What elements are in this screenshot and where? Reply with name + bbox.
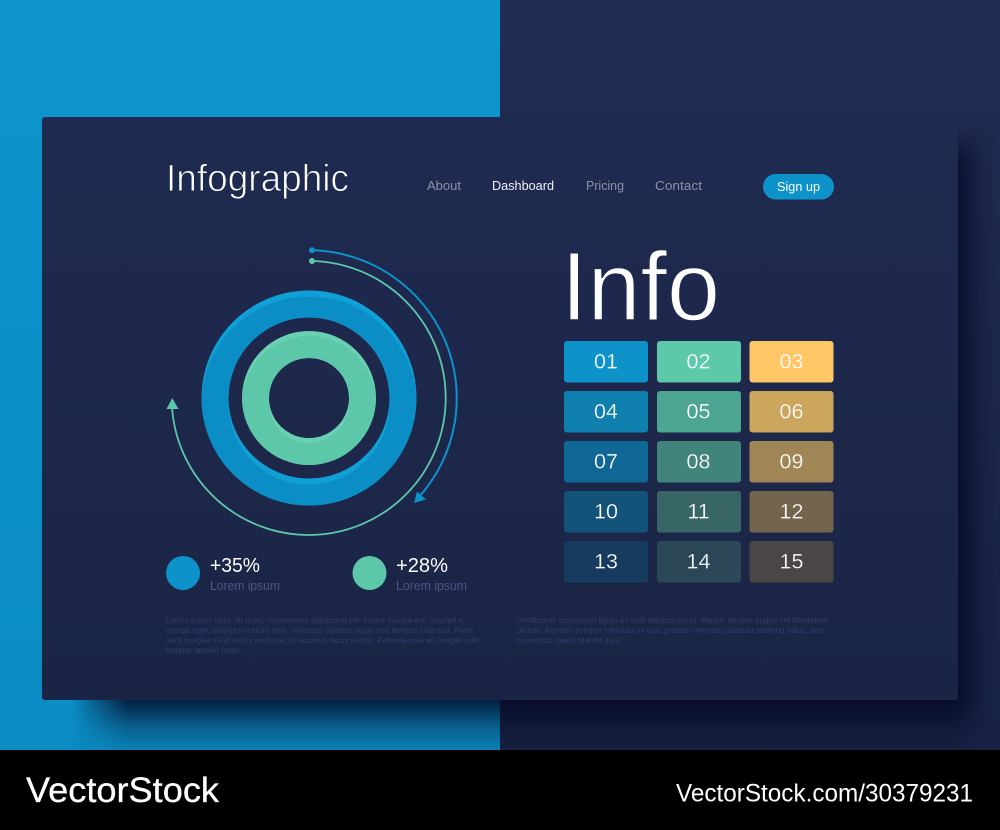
text block: right paragraph: commodo quam blandit quis bbox=[517, 636, 619, 645]
text block: right paragraph bbox=[517, 616, 828, 645]
tile 15 bbox=[750, 541, 834, 582]
tile 10 bbox=[564, 491, 648, 532]
tile 01: 01 bbox=[594, 350, 618, 374]
sign up button bbox=[763, 174, 834, 200]
navigation bbox=[427, 178, 702, 193]
background: right navy panel bbox=[500, 0, 1000, 750]
tile 08 bbox=[657, 441, 741, 482]
text block: left paragraph: sent congue mi ut turpis vehicula, in faucibus lacus auctor. Pellentesque eu feugiat odio, bbox=[166, 636, 482, 645]
stat: +35% bbox=[166, 555, 280, 593]
footer logo: VectorStock bbox=[26, 771, 220, 810]
inner green ring bbox=[242, 331, 376, 465]
tile 11: 11 bbox=[687, 500, 710, 524]
tile 04 bbox=[564, 391, 648, 432]
outer blue ring bbox=[202, 290, 416, 506]
tile 14 bbox=[657, 541, 741, 582]
tile 01 bbox=[564, 341, 648, 382]
tile 12: 12 bbox=[780, 500, 803, 524]
text block: left paragraph: massa eget, aliquet tincidunt nibh. Vivamus dapibus ligula sed tempus placerat. Prae- bbox=[166, 626, 474, 635]
heading: Info: Info bbox=[561, 232, 720, 341]
tile 12 bbox=[750, 491, 834, 532]
tile 11 bbox=[657, 491, 741, 532]
donut chart bbox=[202, 290, 416, 506]
text block: left paragraph bbox=[166, 616, 482, 655]
text block: left paragraph: tempor laoreet justo bbox=[166, 646, 240, 655]
arrow: blue arc bbox=[309, 247, 457, 503]
tile 05: 05 bbox=[687, 400, 710, 424]
nav item: Contact: Contact bbox=[655, 178, 702, 193]
tile 05 bbox=[657, 391, 741, 432]
title: Infographic bbox=[166, 158, 349, 200]
tile 07: 07 bbox=[594, 450, 618, 474]
tile 10: 10 bbox=[594, 500, 618, 524]
background: left blue panel bbox=[0, 0, 500, 750]
nav item: Dashboard: Dashboard bbox=[492, 178, 554, 193]
nav item: Pricing: Pricing bbox=[586, 178, 624, 193]
tile 13 bbox=[564, 541, 648, 582]
footer bar bbox=[0, 750, 1000, 830]
sign up button: Sign up bbox=[777, 179, 820, 194]
tile 13: 13 bbox=[594, 550, 618, 574]
tile 09 bbox=[750, 441, 834, 482]
tile 04: 04 bbox=[594, 400, 618, 424]
stat: +35%: Lorem ipsum bbox=[210, 579, 280, 593]
tile 09: 09 bbox=[780, 450, 803, 474]
tile 02 bbox=[657, 341, 741, 382]
text block: right paragraph: Vestibulum consequat ligula ac velit dapibus porta. Mauris tempor augue vel bibendum bbox=[517, 616, 828, 625]
number grid bbox=[564, 341, 834, 582]
text block: left paragraph: Lorem ipsum dolor sit amet, consectetur adipiscing elit. Fusce magna est, suscipit a bbox=[166, 616, 464, 625]
tile 07 bbox=[564, 441, 648, 482]
tile 02: 02 bbox=[687, 350, 710, 374]
tile 14: 14 bbox=[687, 550, 710, 574]
tile 06: 06 bbox=[780, 400, 803, 424]
arrow: green arc bbox=[166, 258, 446, 535]
stat: +28% bbox=[352, 555, 467, 593]
tile 15: 15 bbox=[780, 550, 803, 574]
footer url: VectorStock.com/30379231 bbox=[676, 780, 973, 808]
stat: +28%: Lorem ipsum bbox=[396, 579, 467, 593]
tile 03 bbox=[750, 341, 834, 382]
panel: main card bbox=[42, 117, 958, 700]
tile 06 bbox=[750, 391, 834, 432]
card shadow bbox=[72, 125, 996, 755]
stat: +35%: +35% bbox=[210, 555, 260, 577]
text block: right paragraph: dictum. Aenean semper vehicula mi quis pretium. Aenean placerat eleifend tellus, sed bbox=[517, 626, 823, 635]
nav item: About: About bbox=[427, 178, 461, 193]
tile 08: 08 bbox=[687, 450, 710, 474]
stat: +28%: +28% bbox=[396, 555, 448, 577]
tile 03: 03 bbox=[780, 350, 803, 374]
